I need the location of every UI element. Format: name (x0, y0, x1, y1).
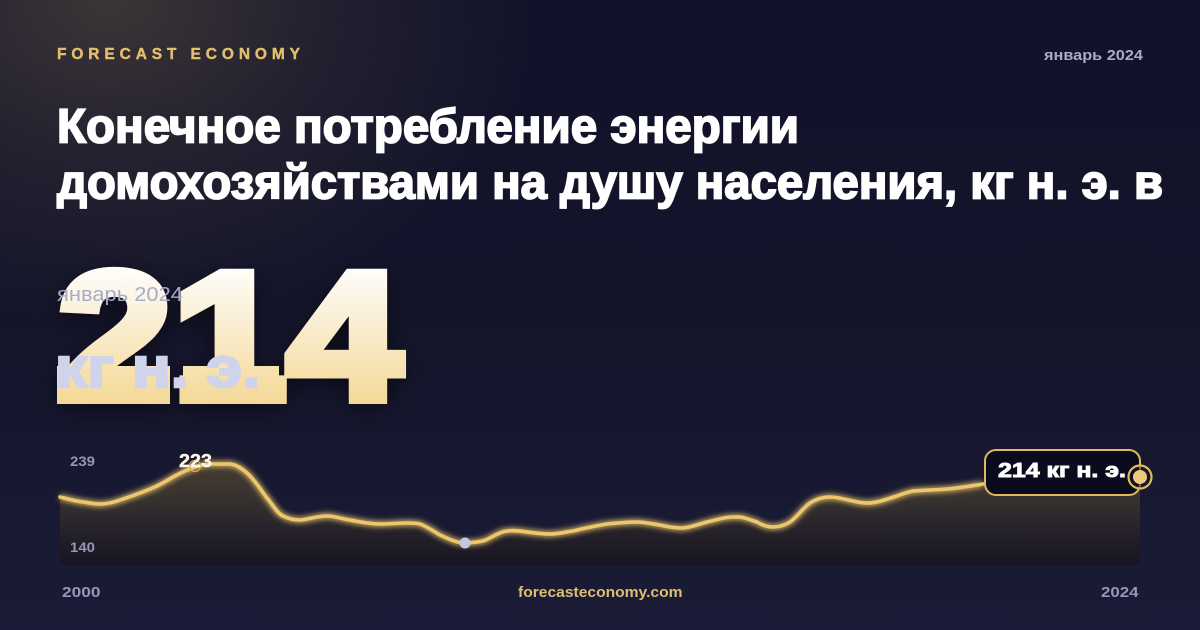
title (57, 100, 1163, 210)
brand label: FORECAST ECONOMY (57, 46, 301, 63)
peak value: 223 (179, 451, 212, 471)
line glow (60, 464, 983, 543)
y axis min: 140 (70, 539, 95, 555)
y axis max: 239 (70, 453, 95, 469)
callout (985, 450, 1140, 495)
minimum marker (460, 538, 470, 548)
big number: 214 (58, 234, 402, 438)
x axis start year: 2000 (62, 584, 100, 601)
unit overlapping number: кг н. э. (55, 336, 260, 400)
peak marker (190, 460, 200, 472)
line chart (60, 464, 1140, 565)
line (60, 464, 983, 543)
x axis end year: 2024 (1101, 584, 1139, 601)
source: forecasteconomy.com (518, 584, 682, 601)
date overlapping number: январь 2024 (57, 284, 183, 306)
date top right: январь 2024 (1044, 47, 1144, 64)
title: Конечное потребление энергии (57, 100, 799, 154)
title: домохозяйствами на душу населения, кг н. э. в (57, 156, 1163, 210)
callout: 214 кг н. э. (998, 460, 1126, 482)
area fill (60, 464, 1140, 565)
end point marker (1128, 466, 1152, 488)
